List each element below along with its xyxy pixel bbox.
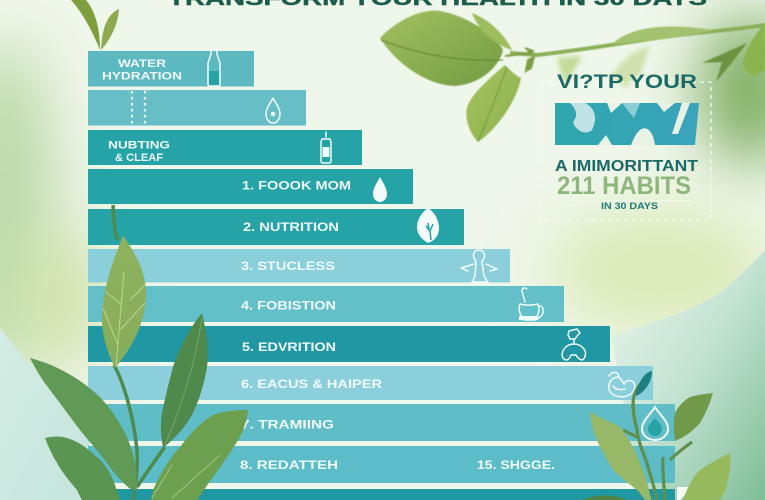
- leaf: lower right: [683, 453, 730, 500]
- swoosh: bottom right: [612, 250, 765, 500]
- bar 9: [88, 366, 653, 400]
- icon: large drop: [642, 407, 668, 440]
- leaf: left long: [30, 358, 137, 490]
- bud: [636, 371, 652, 396]
- leaf: top: [102, 236, 146, 368]
- bar 11: [88, 446, 675, 483]
- leaf: center dark: [161, 313, 208, 448]
- bar 4: [88, 169, 413, 204]
- badge graphic: [555, 103, 699, 145]
- label: water hydration: WATER: [118, 58, 166, 70]
- icon: squeeze bottle: [321, 132, 331, 163]
- icon: water drop outline: [266, 98, 280, 123]
- label 7: 7. TRAMIING: [241, 418, 334, 432]
- leaf: large: [380, 11, 503, 86]
- bar 1: [88, 51, 254, 86]
- label: nurting and cleaf: [108, 140, 170, 164]
- label 5: 5. EDVRITION: [242, 340, 336, 354]
- leaf: lower right: [151, 410, 248, 500]
- icon: white drop: [373, 177, 387, 202]
- label: water hydration: HYDRATION: [102, 70, 182, 82]
- bar 7: [88, 286, 564, 322]
- label 15: 15. SHGGE.: [477, 458, 555, 472]
- dashed frame: [540, 82, 711, 220]
- leaf: dark base: [582, 496, 628, 500]
- staircase bars: [88, 51, 675, 500]
- plant: bottom left: [30, 205, 248, 500]
- bar 5: [88, 209, 464, 245]
- icon: bottle: [208, 49, 220, 86]
- icon: cup: [519, 288, 543, 320]
- bar 3: [88, 130, 362, 165]
- label: nurting and cleaf: & CLEAF: [115, 152, 163, 164]
- icon: heart apple: [609, 372, 635, 397]
- leaf: upper right: [674, 393, 713, 441]
- bar 8: [88, 326, 610, 362]
- badge line: A IMIMORITTANT: [555, 158, 698, 175]
- leaf: dark spike: [702, 43, 747, 82]
- label: water hydration: [102, 58, 182, 82]
- icon: person: [562, 329, 585, 360]
- bar 10: [88, 404, 675, 441]
- label 2: 2. NUTRITION: [243, 220, 339, 234]
- label: nurting and cleaf: NUBTING: [108, 140, 170, 152]
- leaf: left: [590, 412, 652, 500]
- icon: white leaf: [417, 208, 439, 243]
- badge habits: 211 HABITS: [557, 172, 691, 200]
- bar labels: [102, 58, 555, 472]
- bar 12: [88, 489, 675, 500]
- branch with leaves: top right: [380, 11, 765, 142]
- badge days: IN 30 DAYS: [601, 201, 658, 212]
- label 1: 1. FOOOK MOM: [242, 178, 351, 192]
- sprout: [505, 48, 534, 71]
- leaf: narrow upper: [472, 13, 512, 50]
- label 8: 8. REDATTEH: [240, 458, 338, 472]
- dotted connector: [122, 89, 150, 127]
- plant: bottom right: [582, 371, 730, 500]
- stem: [623, 378, 692, 500]
- leaf: right edge: [743, 23, 765, 77]
- stem: [113, 205, 165, 500]
- leaf sprig: top left: [71, 0, 119, 50]
- label 6: 6. EACUS & HAIPER: [241, 377, 382, 391]
- white patch: [677, 487, 692, 500]
- leaf: lower left: [45, 436, 120, 500]
- badge heading: VI?TP YOUR: [557, 72, 697, 93]
- bar 6: [88, 249, 510, 282]
- label 3: 3. STUCLESS: [241, 259, 335, 273]
- swoosh: bottom left: [0, 328, 90, 500]
- leaf: lower: [466, 65, 521, 142]
- badge rule: [570, 200, 693, 202]
- icon: figure: [461, 250, 497, 282]
- label 4: 4. FOBISTION: [241, 298, 336, 312]
- badge: vitp your days: [540, 72, 711, 220]
- bar 2: [88, 90, 306, 126]
